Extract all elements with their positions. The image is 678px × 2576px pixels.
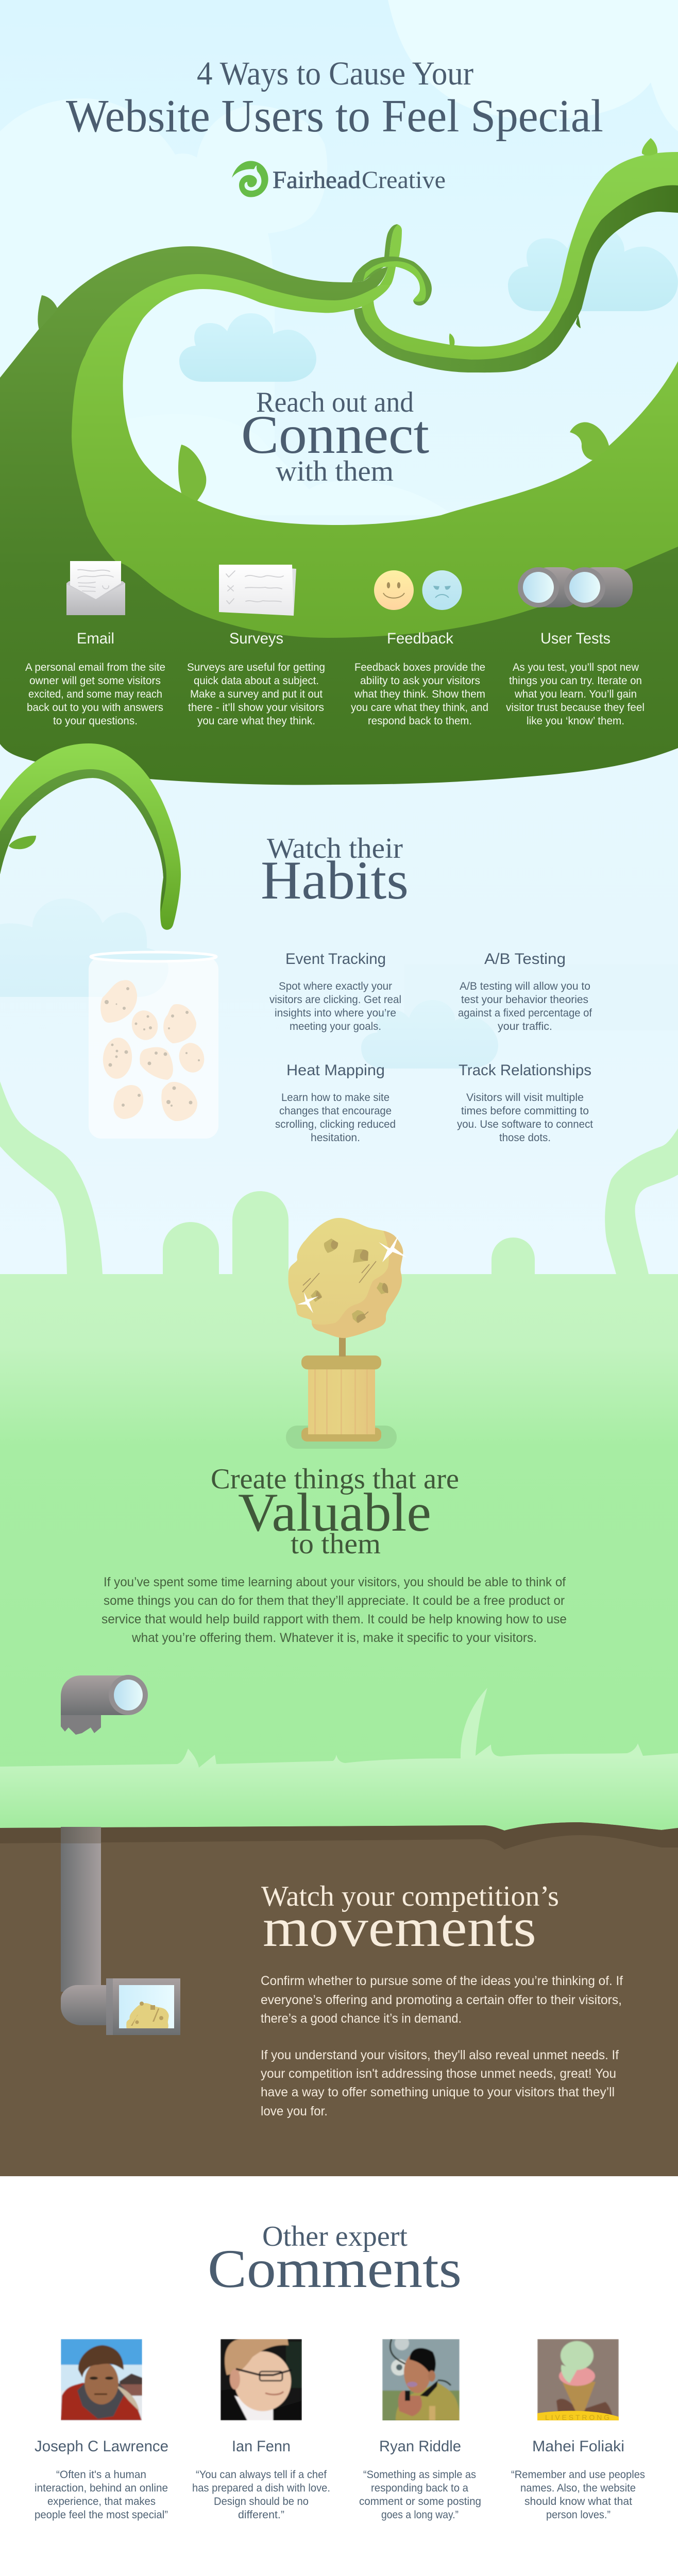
- heading: Reach out and Connect with them: [241, 386, 429, 487]
- vine: stem tip shadow: [384, 225, 398, 260]
- title: Website Users to Feel Special: [66, 91, 603, 142]
- panel: comments background: [0, 2176, 678, 2576]
- logo: Fairhead Creative: Creative: [362, 166, 446, 194]
- ground: [0, 1274, 678, 1831]
- periscope: viewing box: [106, 1978, 180, 2035]
- text: user tests description: visitor trust because they feel: [506, 702, 645, 714]
- heading: Watch your competition's movements: movements: [263, 1897, 536, 1958]
- heading: Create things that are Valuable to them: to them: [291, 1528, 381, 1560]
- trophy: cookie on pedestal: [286, 1218, 412, 1449]
- text: surveys description: quick data about a subject.: [194, 675, 319, 687]
- panel: heat mapping: Learn how to make site: [281, 1092, 389, 1104]
- panel: track relationships: you. Use software to connect: [457, 1118, 593, 1130]
- panel: heat mapping: changes that encourage: [279, 1105, 392, 1117]
- heading: Watch your competition's movements: Watch your competition’s: [261, 1880, 559, 1912]
- text: valuable description: If you’ve spent some time learning about your visitors, you should be able to think of: [104, 1575, 566, 1589]
- text: surveys description: [187, 662, 325, 727]
- text: user tests description: [506, 662, 645, 727]
- stem: [339, 1337, 346, 1357]
- icon: envelope: [66, 561, 125, 615]
- text: valuable description: what you’re offering them. Whatever it is, make it specific to your visitors.: [131, 1631, 537, 1645]
- name: Ryan Riddle: Ryan Riddle: [379, 2438, 461, 2455]
- panel: A/B testing: against a fixed percentage of: [458, 1007, 592, 1019]
- panel: event tracking: Event Tracking: [285, 951, 386, 968]
- quote: Ian: has prepared a dish with love.: [192, 2482, 330, 2494]
- panel: Ian Fenn: [192, 2339, 330, 2521]
- text: competition description: have a way to offer something unique to your visitors that they’ll: [261, 2085, 615, 2099]
- name: Mahei Foliaki: Mahei Foliaki: [532, 2438, 624, 2455]
- leaf: right inner: [570, 422, 609, 460]
- quote: Joseph: [35, 2469, 168, 2521]
- panel: track relationships: those dots.: [499, 1132, 551, 1144]
- text: user tests description: like you ‘know’ them.: [527, 715, 624, 727]
- vine: curl dark ring: [352, 257, 432, 306]
- leaf: small on branch: [449, 333, 454, 346]
- text: email description: A personal email from the site: [25, 662, 165, 673]
- text: competition description: everyone’s offering and promoting a certain offer to their visitors,: [261, 1993, 622, 2007]
- background clouds: header: [0, 0, 678, 515]
- panel: heat mapping: [275, 1062, 396, 1144]
- text: valuable description: some things you can do for them that they’ll appreciate. It could be a free product or: [104, 1594, 565, 1608]
- vine: curl light inner: [363, 261, 426, 302]
- quote: Ryan: goes a long way.”: [381, 2509, 459, 2521]
- panel: event tracking: Spot where exactly your: [279, 980, 392, 992]
- panel: track relationships: times before committing to: [461, 1105, 589, 1117]
- panel: A/B testing: A/B testing will allow you to: [460, 980, 590, 992]
- quote: Mahei: names. Also, the website: [520, 2482, 636, 2494]
- text: email description: owner will get some visitors: [29, 675, 161, 687]
- heading: Reach out and Connect with them: Reach out and: [256, 386, 414, 418]
- panel: A/B testing: A/B Testing: [484, 951, 566, 968]
- panel: A/B testing: [458, 951, 592, 1032]
- photo: Ryan: [382, 2336, 460, 2421]
- text: competition description: If you understand your visitors, they'll also reveal unmet needs. If: [261, 2048, 619, 2062]
- label: Surveys: Surveys: [229, 630, 283, 647]
- heading: Watch their Habits: Habits: [261, 850, 409, 910]
- text: surveys description: Surveys are useful for getting: [187, 662, 325, 673]
- text: feedback description: what they think. Show them: [354, 688, 485, 700]
- periscope: top end: [61, 1675, 148, 1735]
- vine: knot stem front: [380, 266, 396, 285]
- quote: Mahei: “Remember and use peoples: [511, 2469, 645, 2481]
- panel: Ryan Riddle: [359, 2336, 481, 2521]
- panel: event tracking: insights into where you’re: [275, 1007, 396, 1019]
- leaf: on arch: [9, 836, 36, 849]
- icon: survey sheet: [219, 565, 296, 616]
- grass ridge: [0, 1688, 678, 1834]
- clouds: habits section: [0, 899, 678, 1069]
- quote: Mahei: should know what that: [524, 2496, 632, 2507]
- quote: Ryan: “Something as simple as: [363, 2469, 476, 2481]
- title: [66, 55, 603, 142]
- text: surveys description: Make a survey and put it out: [190, 688, 323, 700]
- sky background: [0, 0, 678, 1274]
- panel: event tracking: [269, 951, 401, 1032]
- panel: Mahei Foliaki: [511, 2339, 645, 2521]
- vine: main body: [0, 224, 678, 785]
- quote: Joseph: “Often it's a human: [56, 2469, 146, 2481]
- cookie chips: [311, 1239, 388, 1323]
- heading: Other expert Comments: Comments: [208, 2239, 462, 2299]
- panel: heat mapping: scrolling, clicking reduced: [275, 1118, 396, 1130]
- logo: Fairhead Creative: Fairhead: [273, 166, 361, 194]
- text: email description: excited, and some may reach: [28, 688, 162, 700]
- panel: heat mapping: hesitation.: [311, 1132, 360, 1144]
- text: competition description: there’s a good chance it’s in demand.: [261, 2011, 462, 2026]
- text: feedback description: [351, 662, 488, 727]
- quote: Joseph: interaction, behind an online: [35, 2482, 168, 2494]
- cookies: [100, 980, 208, 1121]
- panel: email: [25, 561, 165, 727]
- text: competition description: your competition isn't addressing those unmet needs, great! You: [261, 2066, 616, 2081]
- panel: track relationships: Track Relationships: [459, 1062, 591, 1079]
- heading: Watch your competition's movements: [261, 1880, 559, 1958]
- label: Feedback: Feedback: [387, 630, 454, 647]
- sparkles: [297, 1235, 407, 1313]
- vine: dark outer band: [0, 246, 678, 785]
- text: feedback description: ability to ask your visitors: [360, 675, 480, 687]
- pedestal cap: [301, 1355, 381, 1369]
- leaf: left on dark band: [38, 295, 58, 330]
- vine: hanging arch: [0, 743, 181, 930]
- icon: happy and sad faces: [374, 570, 462, 610]
- text: feedback description: you care what they think, and: [351, 702, 488, 714]
- photo: Joseph: [61, 2339, 142, 2421]
- text: competition description: [261, 1974, 623, 2119]
- heading: Create things that are Valuable to them: Create things that are: [211, 1463, 459, 1495]
- quote: Mahei: person loves.”: [546, 2509, 611, 2521]
- panel: A/B testing: your traffic.: [498, 1021, 552, 1032]
- panel: event tracking: visitors are clicking. Get real: [269, 994, 401, 1006]
- heading: Reach out and Connect with them: with them: [276, 455, 394, 487]
- heading: Watch their Habits: Watch their: [267, 833, 403, 865]
- cloud: in vine bowl: [179, 313, 316, 382]
- vine: right branch: [354, 138, 678, 372]
- title: 4 Ways to Cause Your: [197, 55, 473, 92]
- soil: [0, 1822, 678, 2176]
- heading: Other expert Comments: Other expert: [262, 2221, 408, 2252]
- panel: heat mapping: Heat Mapping: [286, 1062, 385, 1079]
- logo: Fairhead Creative: [232, 161, 446, 197]
- quote: Joseph: people feel the most special”: [35, 2509, 168, 2521]
- name: Joseph C Lawrence: Joseph C Lawrence: [35, 2438, 168, 2455]
- name: Ian Fenn: Ian Fenn: [232, 2438, 291, 2455]
- cookie: [289, 1218, 403, 1338]
- quote: Ian: [192, 2469, 330, 2521]
- text: user tests description: things you can try. Iterate on: [509, 675, 642, 687]
- pedestal shadow: [286, 1426, 397, 1449]
- text: email description: [25, 662, 165, 727]
- pedestal base: [301, 1428, 381, 1442]
- vine: light inner band: [72, 224, 678, 638]
- text: valuable description: [101, 1575, 567, 1645]
- panel: user tests: [506, 567, 645, 727]
- photo: Ian: [221, 2339, 302, 2420]
- heading: Reach out and Connect with them: Connect: [241, 404, 429, 465]
- text: valuable description: service that would help build rapport with them. It could be help knowing how to use: [101, 1612, 567, 1626]
- quote: Ian: Design should be no: [214, 2496, 309, 2507]
- quote: Ian: “You can always tell if a chef: [196, 2469, 327, 2481]
- quote: Mahei: [511, 2469, 645, 2521]
- label: Email: Email: [77, 630, 114, 647]
- text: user tests description: As you test, you’ll spot new: [513, 662, 639, 673]
- panel: feedback: [351, 570, 488, 727]
- text: surveys description: you care what they think.: [197, 715, 315, 727]
- panel: Joseph C Lawrence: [35, 2339, 168, 2521]
- text: email description: to your questions.: [53, 715, 138, 727]
- panel: surveys: [187, 565, 325, 727]
- heading: Create things that are Valuable to them: Valuable: [238, 1482, 431, 1543]
- jar of cookies: [89, 952, 218, 1139]
- leaf: tiny under branch: [576, 314, 581, 328]
- panel: A/B testing: test your behavior theories: [461, 994, 588, 1006]
- text: user tests description: what you learn. You’ll gain: [514, 688, 637, 700]
- cloud: right of vine: [508, 226, 678, 311]
- quote: Ryan: responding back to a: [371, 2482, 468, 2494]
- panel: track relationships: Visitors will visit multiple: [466, 1092, 584, 1104]
- heading: Create things that are Valuable to them: [211, 1463, 459, 1560]
- pedestal column: [308, 1369, 375, 1434]
- panel: event tracking: meeting your goals.: [290, 1021, 381, 1032]
- text: feedback description: Feedback boxes provide the: [354, 662, 485, 673]
- label: User Tests: User Tests: [540, 630, 611, 647]
- photo: Mahei: [537, 2339, 619, 2421]
- cookie chips: [105, 987, 200, 1107]
- photo: Mahei: LIVESTRONG: [545, 2413, 609, 2421]
- quote: Ryan: [359, 2469, 481, 2521]
- panel: track relationships: [457, 1062, 593, 1144]
- periscope: underground: [61, 1827, 180, 2047]
- background vines and hills: [0, 1081, 678, 1274]
- text: surveys description: there - it’ll show your visitors: [188, 702, 324, 714]
- quote: Ian: different.”: [238, 2509, 284, 2521]
- text: email description: back out to you with answers: [27, 702, 163, 714]
- text: competition description: Confirm whether to pursue some of the ideas you’re thinking of. If: [261, 1974, 623, 1988]
- leaf: inner left: [178, 445, 206, 501]
- quote: Ryan: comment or some posting: [359, 2496, 481, 2507]
- text: competition description: love you for.: [261, 2104, 328, 2119]
- leaf: top right: [642, 138, 657, 156]
- text: feedback description: respond back to them.: [368, 715, 472, 727]
- cookie scratches: [302, 1261, 376, 1315]
- quote: Joseph: experience, that makes: [47, 2496, 156, 2507]
- icon: binoculars: [518, 567, 633, 607]
